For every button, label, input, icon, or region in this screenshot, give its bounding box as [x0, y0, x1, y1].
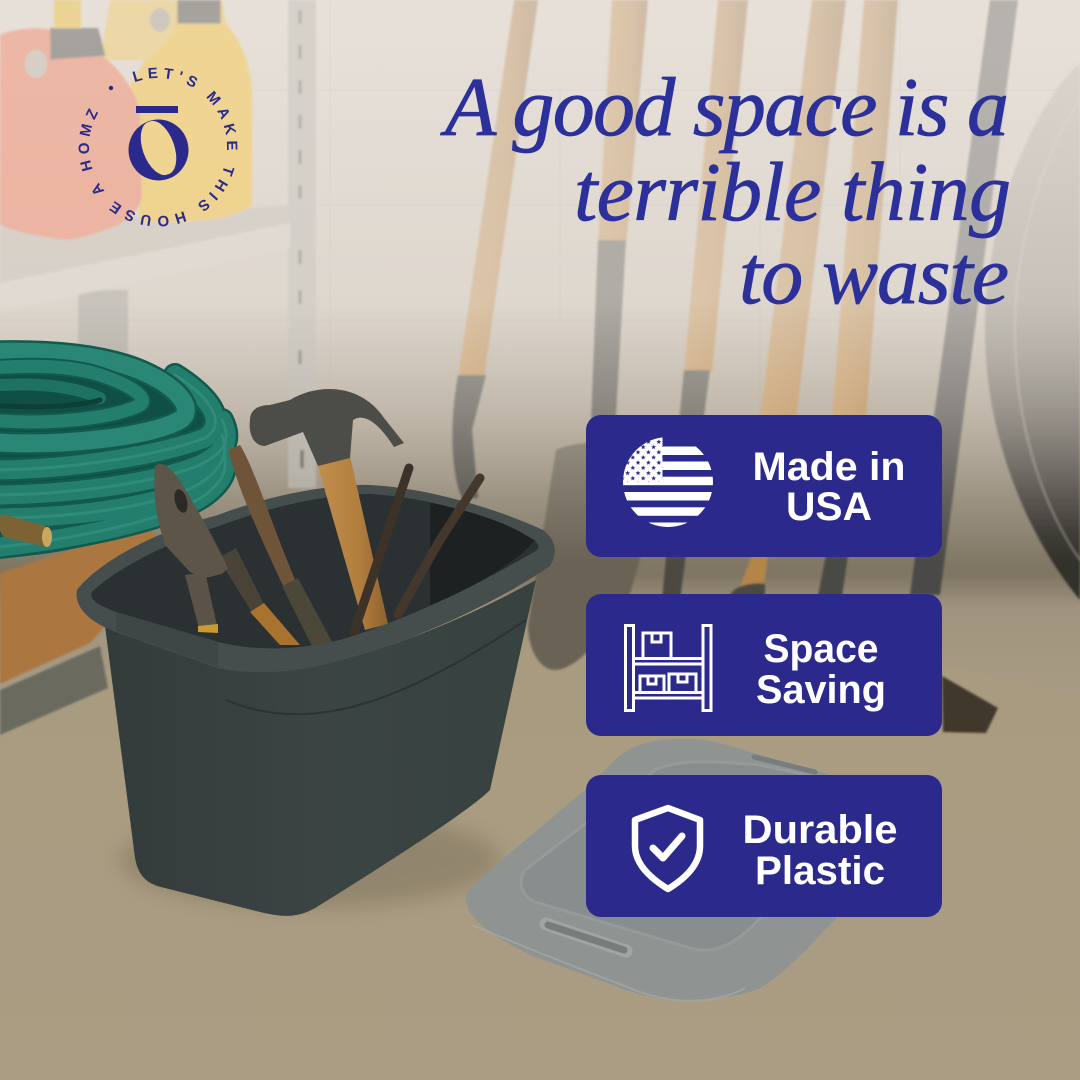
label: durable plastic: Durable: [742, 808, 898, 852]
cardboard box and lower shelf: [0, 525, 165, 735]
label: space saving: Space: [764, 627, 878, 671]
background: tool handles leaning on wall: [452, 0, 1080, 733]
circular tagline text: LET'S MAKE THIS HOUSE A HOMZ: [78, 68, 238, 226]
pliers: [154, 464, 300, 645]
headline: to waste: [739, 229, 1009, 322]
bin shadow: [120, 812, 500, 908]
label: durable plastic: Plastic: [755, 849, 885, 893]
thin rods: [354, 468, 480, 632]
storage bin with tools: [77, 389, 555, 916]
label: space saving: Saving: [756, 668, 886, 712]
garden hose: [0, 344, 229, 558]
bin lid on floor: [466, 739, 836, 1001]
icon: american flag circle: [623, 437, 713, 527]
logo badge: circular tagline with O mark: [78, 68, 238, 226]
feature badge: durable plastic: [586, 775, 942, 917]
chisel tool: [228, 445, 332, 646]
headline: terrible thing: [574, 146, 1011, 239]
background: metal shelf with jugs: [0, 0, 316, 488]
bin front rim: [77, 530, 555, 714]
white haze over upper photo: [0, 0, 1080, 640]
feature badge: made in USA: [586, 415, 942, 557]
icon: storage rack with boxes: [626, 626, 711, 710]
bin body: [105, 580, 536, 916]
hose brass connector: [0, 514, 52, 547]
label: made in USA: [752, 445, 906, 529]
label: made in USA: USA: [786, 485, 872, 529]
hammer: [250, 389, 404, 630]
feature badge: space saving: [586, 594, 942, 736]
headline: A good space is a: [440, 61, 1009, 154]
icon: shield with check: [635, 808, 700, 889]
label: durable plastic: [742, 808, 898, 893]
label: made in USA: Made in: [752, 445, 906, 489]
bin rim and interior: [77, 485, 555, 672]
headline: [440, 61, 1011, 322]
label: space saving: [756, 627, 886, 712]
